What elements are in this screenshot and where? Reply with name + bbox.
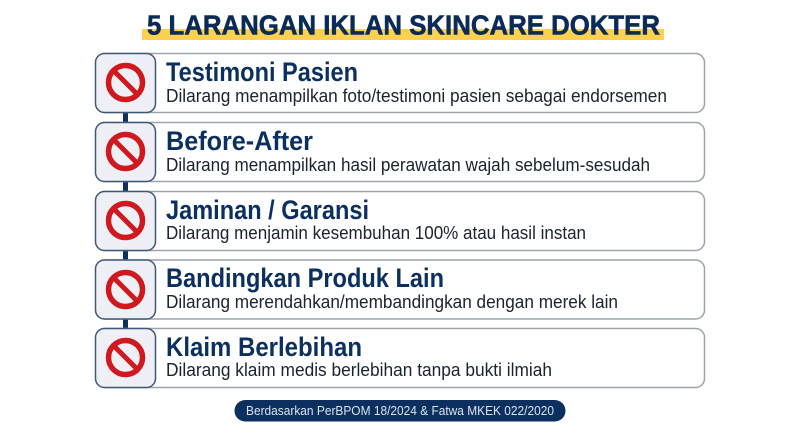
icon: prohibition sign — [96, 328, 156, 388]
heading: Bandingkan Produk Lain — [166, 263, 444, 293]
card: Klaim Berlebihan — [96, 328, 704, 388]
icon: prohibition sign — [96, 122, 156, 182]
heading: Jaminan / Garansi — [166, 195, 369, 225]
heading: Testimoni Pasien — [166, 57, 358, 87]
icon: prohibition sign — [96, 54, 156, 112]
heading: Before-After — [166, 126, 313, 156]
card: Bandingkan Produk Lain — [96, 260, 704, 319]
icon: prohibition sign — [96, 260, 156, 319]
description: Dilarang klaim medis berlebihan tanpa bukti ilmiah — [166, 359, 552, 380]
card: Testimoni Pasien — [96, 54, 704, 112]
description: Dilarang menampilkan foto/testimoni pasien sebagai endorsemen — [166, 85, 667, 106]
description: Dilarang menjamin kesembuhan 100% atau hasil instan — [166, 222, 586, 243]
card: Jaminan / Garansi — [96, 192, 704, 250]
footer source pill: Berdasarkan PerBPOM 18/2024 & Fatwa MKEK 022/2020 — [246, 403, 554, 418]
description: Dilarang merendahkan/membandingkan dengan merek lain — [166, 291, 618, 312]
icon: prohibition sign — [96, 192, 156, 250]
heading: Klaim Berlebihan — [166, 332, 362, 362]
title: 5 LARANGAN IKLAN SKINCARE DOKTER — [147, 10, 660, 40]
description: Dilarang menampilkan hasil perawatan wajah sebelum-sesudah — [166, 154, 650, 175]
connector line — [123, 110, 128, 332]
footer source pill — [234, 400, 566, 422]
card: Before-After — [96, 122, 704, 182]
